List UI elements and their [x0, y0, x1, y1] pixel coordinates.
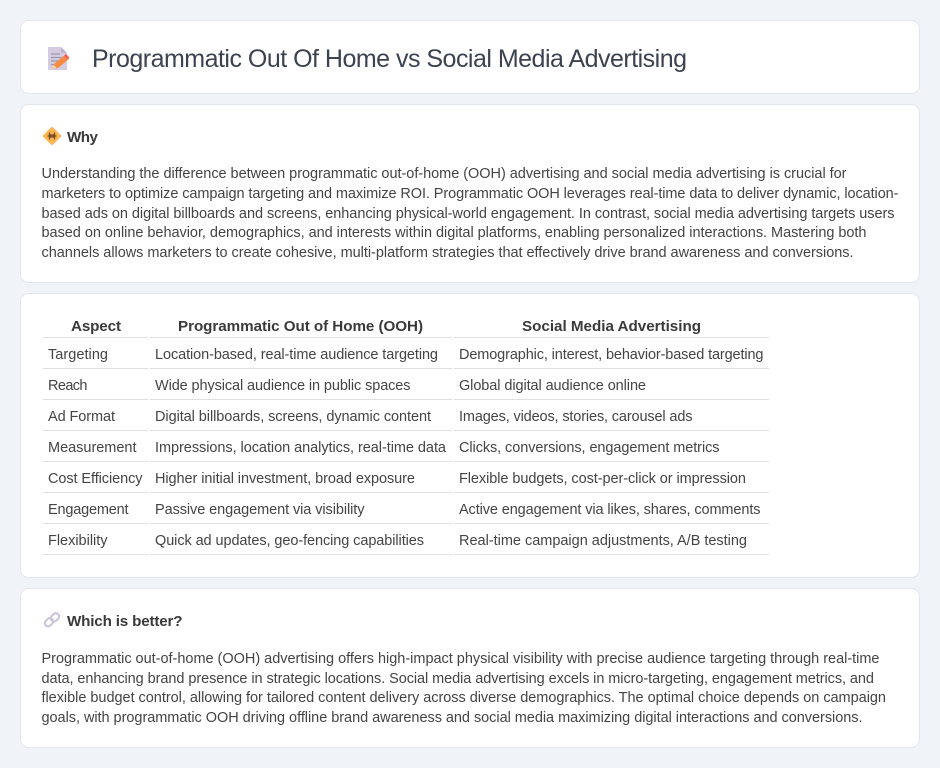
- table row: measurement: Clicks, conversions, engagement metrics: [459, 440, 720, 456]
- which is better paragraph: goals, with programmatic OOH driving offline brand awareness and social media maximizing digital interactions and conversions.: [42, 710, 862, 726]
- which is better paragraph: data, enhancing brand presence in strategic locations. Social media advertising excels in micro-targeting, engagement metrics, and: [42, 671, 874, 687]
- table row: cost efficiency: Cost Efficiency: [48, 471, 143, 487]
- icon: orange diamond: [44, 128, 60, 144]
- table row: measurement: Impressions, location analytics, real-time data: [155, 440, 447, 456]
- which is better paragraph: Programmatic out-of-home (OOH) advertising offers high-impact physical visibility with precise audience targeting through real-time: [42, 651, 880, 667]
- table row: engagement: [43, 502, 769, 524]
- why paragraph: marketers to optimize campaign targeting and maximize ROI. Programmatic OOH leverages real-time data to deliver dynamic, location-: [42, 186, 899, 202]
- table row: flexibility: Quick ad updates, geo-fencing capabilities: [155, 533, 424, 549]
- panel: comparison table: [20, 294, 920, 578]
- icon: chain link: [44, 612, 60, 628]
- table row: flexibility: [43, 533, 769, 555]
- table header row: [43, 318, 769, 338]
- table header row: Social Media Advertising: [522, 318, 701, 335]
- table row: targeting: [43, 347, 769, 369]
- table row: ad format: Ad Format: [48, 409, 115, 425]
- table row: ad format: [43, 409, 769, 431]
- table row: engagement: Active engagement via likes, shares, comments: [459, 502, 760, 518]
- table row: flexibility: Flexibility: [48, 533, 108, 549]
- table row: measurement: Measurement: [48, 440, 136, 456]
- table row: reach: [43, 378, 769, 400]
- which is better paragraph: flexible budget control, allowing for tailored content delivery across diverse demographics. The optimal choice depends on campaign: [42, 690, 886, 706]
- table row: cost efficiency: Flexible budgets, cost-per-click or impression: [459, 471, 746, 487]
- table row: ad format: Images, videos, stories, carousel ads: [459, 409, 692, 425]
- table row: targeting: Targeting: [48, 347, 108, 363]
- title: Programmatic Out Of Home vs Social Media Advertising: [92, 45, 687, 73]
- which is better paragraph: [42, 651, 886, 726]
- table header row: Programmatic Out of Home (OOH): [178, 318, 423, 335]
- table row: reach: Wide physical audience in public spaces: [155, 378, 410, 394]
- table row: measurement: [43, 440, 769, 462]
- why paragraph: based ads on digital billboards and screens, enhancing physical-world engagement. In contrast, social media advertising targets users: [42, 206, 894, 222]
- table row: targeting: Location-based, real-time audience targeting: [155, 347, 438, 363]
- panel: why: [20, 104, 920, 282]
- heading: why: Why: [67, 129, 99, 146]
- table row: engagement: Passive engagement via visibility: [155, 502, 365, 518]
- table row: targeting: Demographic, interest, behavior-based targeting: [459, 347, 764, 363]
- heading: which is better: Which is better?: [67, 613, 182, 630]
- why paragraph: [42, 166, 899, 261]
- icon: memo with pencil: [48, 47, 70, 70]
- table header row: Aspect: [71, 318, 121, 335]
- panel: which is better: [20, 588, 920, 748]
- table row: engagement: Engagement: [48, 502, 128, 518]
- table row: flexibility: Real-time campaign adjustments, A/B testing: [459, 533, 747, 549]
- table row: reach: Reach: [48, 378, 88, 394]
- table row: cost efficiency: Higher initial investment, broad exposure: [155, 471, 415, 487]
- why paragraph: channels allows marketers to create cohesive, multi-platform strategies that effectively drive brand awareness and conversions.: [42, 245, 854, 261]
- panel: title header: [20, 20, 920, 94]
- table row: reach: Global digital audience online: [459, 378, 646, 394]
- why paragraph: based on online behavior, demographics, and interests within digital platforms, enabling personalized interactions. Mastering both: [42, 225, 866, 241]
- table row: cost efficiency: [43, 471, 769, 493]
- table row: ad format: Digital billboards, screens, dynamic content: [155, 409, 431, 425]
- why paragraph: Understanding the difference between programmatic out-of-home (OOH) advertising and social media advertising is crucial for: [42, 166, 847, 182]
